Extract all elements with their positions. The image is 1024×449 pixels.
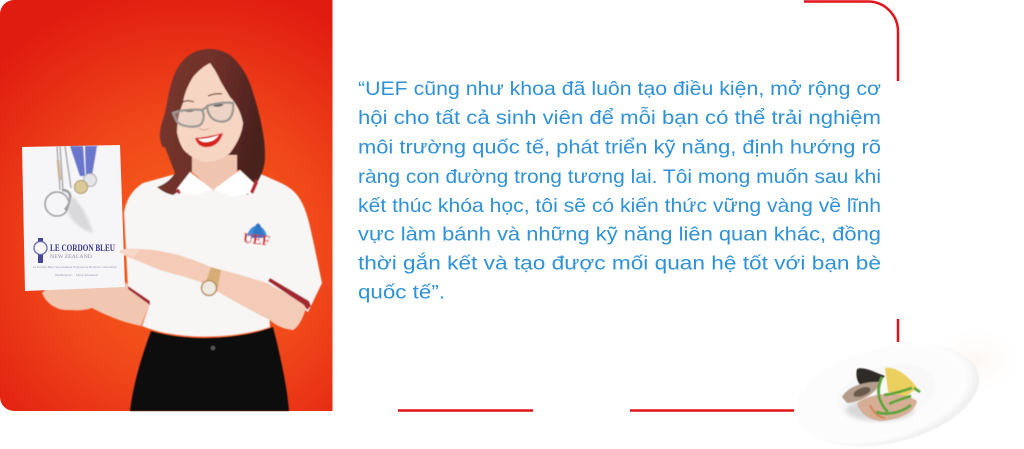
skirt	[130, 327, 289, 411]
neck	[192, 155, 237, 191]
warm glow	[920, 322, 1024, 398]
mouth	[195, 133, 223, 147]
nose	[199, 128, 209, 130]
quote text: vực làm bánh và những kỹ năng liên quan khác, đồng	[358, 224, 881, 246]
brochure small text: Le Cordon Bleu New Zealand Programme Brochure Information	[33, 266, 118, 269]
quote text	[358, 78, 881, 304]
brochure: Le Cordon Bleu	[22, 145, 125, 291]
mussel dark centre	[852, 385, 872, 399]
left arm and held hand	[42, 282, 150, 326]
lemon	[885, 368, 917, 397]
plate	[785, 327, 989, 449]
brochure: Le Cordon Bleu: NEW ZEALAND	[50, 255, 92, 260]
quote text: quốc tế”.	[358, 282, 445, 304]
quote text: thời gắn kết và tạo được mối quan hệ tốt với bạn bè	[358, 252, 881, 274]
right sleeve stripes	[268, 278, 311, 310]
red-orange photo background	[0, 0, 332, 411]
medal ribbons	[70, 146, 97, 176]
quote text: kết thúc khóa học, tôi sẽ có kiến thức vững vàng về lĩnh	[358, 195, 881, 217]
shirt body and sleeves	[124, 170, 322, 337]
mussel flesh	[842, 382, 880, 403]
panel: photo portrait	[0, 0, 332, 411]
plate shadow under food	[846, 399, 914, 421]
watch	[202, 267, 221, 296]
UEF logo	[242, 222, 271, 250]
collar stripes	[176, 178, 258, 194]
eyebrows and eyes	[181, 94, 222, 103]
quote text: ràng con đường trong tương lai. Tôi mong muốn sau khi	[358, 166, 881, 188]
collar	[176, 170, 255, 197]
food	[842, 368, 920, 421]
skirt button	[211, 346, 215, 350]
quote text: môi trường quốc tế, phát triển kỹ năng, định hướng rõ	[358, 136, 881, 158]
decorative red frame	[398, 1, 898, 410]
plate inner well	[832, 355, 942, 431]
logo emblem	[34, 238, 47, 263]
green vegetable strips	[876, 377, 920, 414]
brochure: Le Cordon Bleu: Wellington · New Zealand	[55, 273, 98, 277]
prawn orange stripe	[870, 405, 885, 418]
mussel dark shell	[856, 368, 885, 389]
face	[177, 63, 243, 162]
feather shading	[68, 196, 93, 233]
person: student	[42, 49, 322, 411]
hair	[157, 49, 265, 195]
UEF logo: UEF	[242, 230, 271, 250]
forearm and pointing hand	[120, 249, 307, 330]
logo text: LE CORDON BLEU	[50, 244, 115, 254]
fingers on brochure edge	[120, 249, 140, 257]
glasses	[173, 103, 233, 127]
left sleeve stripes	[128, 286, 150, 305]
whisk	[45, 146, 71, 216]
prawn body	[857, 394, 917, 421]
quote text: “UEF cũng như khoa đã luôn tạo điều kiện, mở rộng cơ	[358, 78, 881, 100]
quote text: hội cho tất cả sinh viên để mỗi bạn có thể trải nghiệm	[358, 106, 881, 129]
illustration: plate of food	[785, 322, 1024, 449]
medals	[74, 174, 96, 194]
